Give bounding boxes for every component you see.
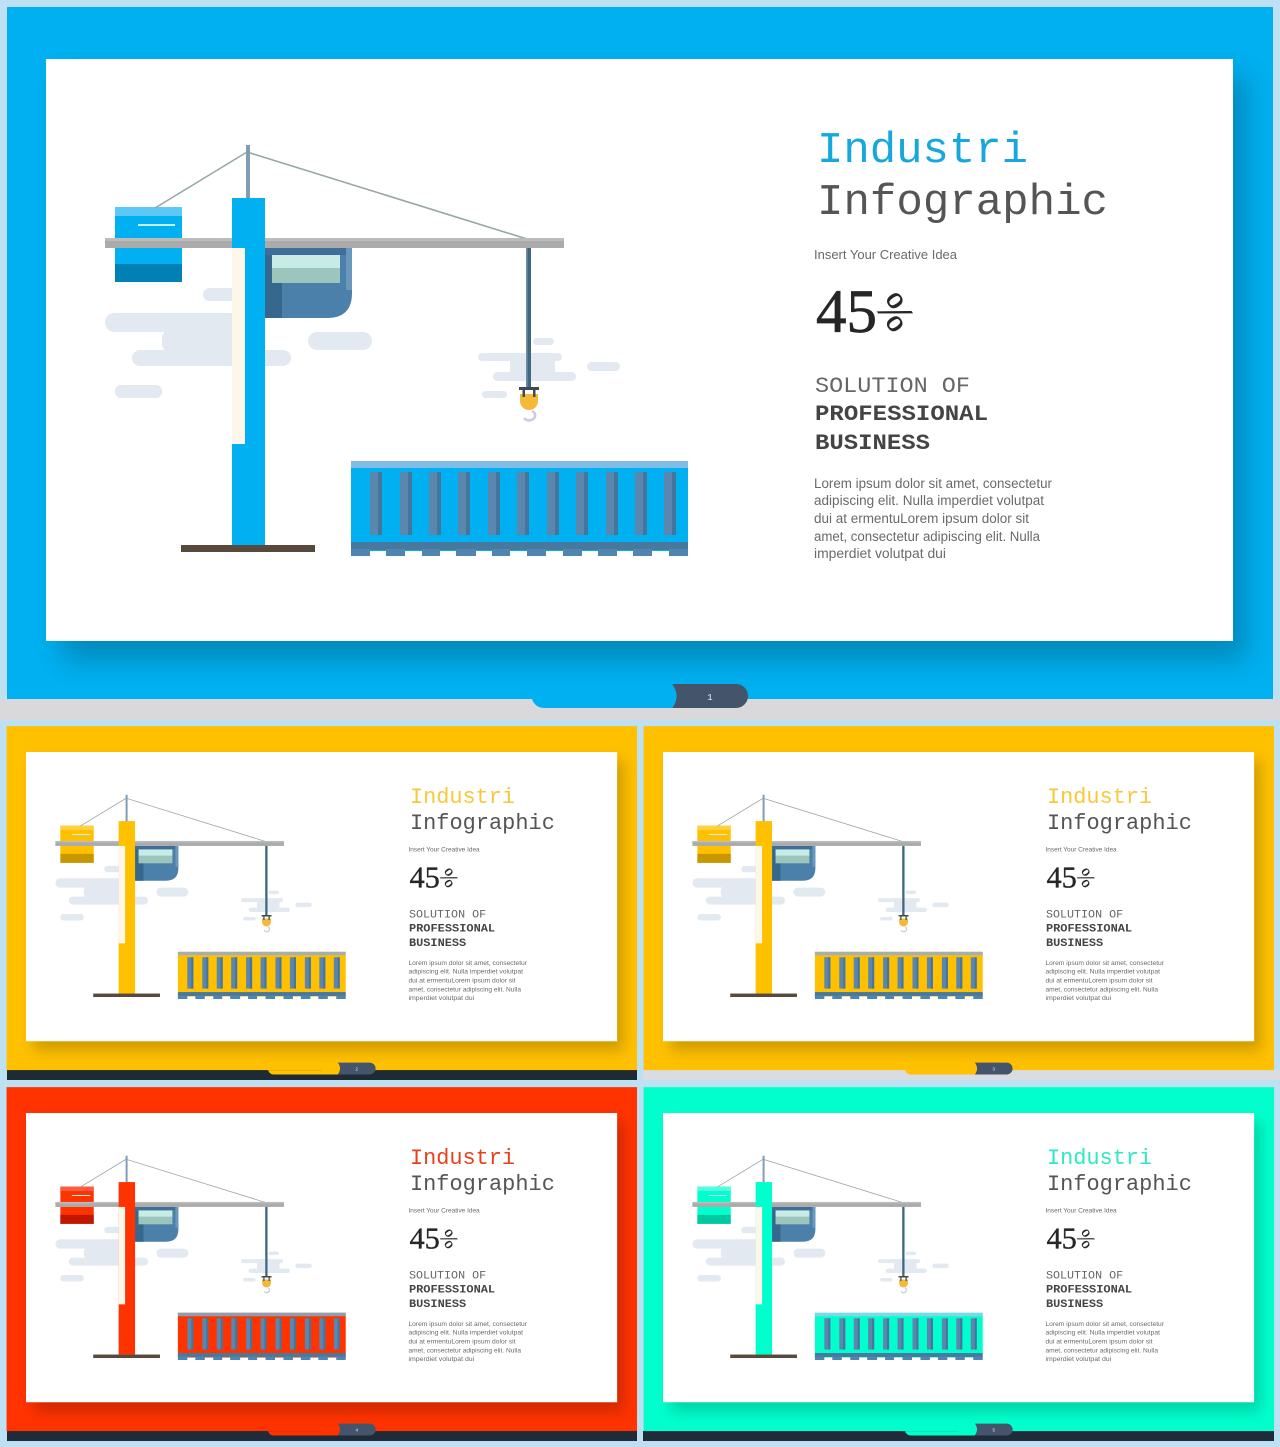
dark footer bar slide 2 xyxy=(7,1070,637,1080)
body text: amet, consectetur adipiscing elit. Nulla xyxy=(408,987,521,994)
body text: adipiscing elit. Nulla imperdiet volutpat xyxy=(1045,1330,1160,1337)
body text xyxy=(1045,960,1165,1002)
counterweight xyxy=(60,826,94,863)
operator cab xyxy=(135,846,178,881)
body text: dui at ermentuLorem ipsum dolor sit xyxy=(408,978,516,985)
heading line 2: PROFESSIONAL xyxy=(1046,1284,1132,1296)
percent sign: % xyxy=(1071,864,1101,892)
title line 1: Industri xyxy=(817,126,1028,176)
title line 1: Industri xyxy=(1047,1146,1152,1171)
slide background xyxy=(7,726,637,1070)
body text: amet, consectetur adipiscing elit. Nulla xyxy=(1045,987,1158,994)
heading line 1: SOLUTION OF xyxy=(409,910,486,921)
page tab xyxy=(905,1424,1013,1436)
page tab: 4 xyxy=(355,1428,358,1434)
shipping container xyxy=(351,461,688,556)
title line 2: Infographic xyxy=(817,178,1108,228)
dark footer bar slide 4 xyxy=(7,1431,637,1441)
body text xyxy=(814,476,1052,561)
clouds xyxy=(105,288,620,398)
page tab xyxy=(268,1424,376,1436)
panel: red slide 4 xyxy=(7,1087,637,1436)
heading line 1: SOLUTION OF xyxy=(1046,1271,1123,1283)
crane tower and jib xyxy=(55,795,284,997)
body text: Lorem ipsum dolor sit amet, consectetur xyxy=(408,1321,528,1328)
body text: imperdiet volutpat dui xyxy=(408,1356,475,1363)
slide background xyxy=(7,1087,637,1431)
shipping container xyxy=(815,1313,983,1360)
hook and rope xyxy=(519,248,539,420)
operator cab xyxy=(265,248,352,318)
white card xyxy=(46,59,1233,641)
big number: 45 xyxy=(1046,861,1077,895)
operator cab xyxy=(135,1207,178,1242)
slide background xyxy=(7,7,1273,699)
heading line 2: PROFESSIONAL xyxy=(1046,923,1132,935)
title line 2: Infographic xyxy=(410,811,555,836)
slide background xyxy=(644,1087,1274,1431)
white card xyxy=(26,1113,617,1402)
crane tower and jib xyxy=(692,1156,921,1358)
page tab: 2 xyxy=(355,1067,358,1073)
slide background xyxy=(644,726,1274,1070)
card shadow xyxy=(62,76,1246,660)
hook and rope xyxy=(899,1207,909,1293)
gray band under main slide xyxy=(0,699,1280,720)
big number: 45 xyxy=(1046,1222,1077,1256)
body text: dui at ermentuLorem ipsum dolor sit xyxy=(1045,978,1153,985)
heading line 1: SOLUTION OF xyxy=(409,1271,486,1283)
percent sign: % xyxy=(434,864,464,892)
clouds xyxy=(692,1227,949,1281)
body text: Lorem ipsum dolor sit amet, consectetur xyxy=(408,960,528,967)
page tab xyxy=(268,1063,376,1075)
body text xyxy=(1045,1321,1165,1363)
crane tower and jib xyxy=(55,1156,284,1358)
white card xyxy=(663,1113,1254,1402)
crane tower and jib xyxy=(692,795,921,997)
big number: 45 xyxy=(816,279,877,346)
heading line 3: BUSINESS xyxy=(815,431,930,456)
panel: main blue slide xyxy=(7,7,1273,708)
heading line 3: BUSINESS xyxy=(409,938,467,950)
body text: adipiscing elit. Nulla imperdiet volutpat xyxy=(814,493,1044,508)
big number: 45 xyxy=(409,861,440,895)
percent sign: % xyxy=(865,285,923,340)
body text: adipiscing elit. Nulla imperdiet volutpat xyxy=(408,1330,523,1337)
title line 2: Infographic xyxy=(1047,811,1192,836)
body text: imperdiet volutpat dui xyxy=(408,995,475,1002)
card shadow xyxy=(34,1121,624,1412)
counterweight xyxy=(60,1187,94,1224)
title line 1: Industri xyxy=(410,1146,515,1171)
operator cab xyxy=(772,846,815,881)
body text: adipiscing elit. Nulla imperdiet volutpat xyxy=(1045,969,1160,976)
white card xyxy=(26,752,617,1041)
percent sign: % xyxy=(434,1225,464,1253)
subtitle: Insert Your Creative Idea xyxy=(1045,1207,1117,1214)
card shadow xyxy=(671,1121,1261,1412)
text block xyxy=(408,1146,555,1363)
counterweight xyxy=(115,207,182,282)
body text: adipiscing elit. Nulla imperdiet volutpat xyxy=(408,969,523,976)
dark footer bar slide 5 xyxy=(643,1431,1274,1441)
percent sign: % xyxy=(1071,1225,1101,1253)
body text: dui at ermentuLorem ipsum dolor sit xyxy=(814,511,1029,526)
heading line 1: SOLUTION OF xyxy=(815,374,970,399)
page tab xyxy=(532,684,748,708)
heading line 3: BUSINESS xyxy=(1046,938,1104,950)
page tab: 5 xyxy=(992,1428,995,1434)
subtitle: Insert Your Creative Idea xyxy=(408,1207,480,1214)
white card xyxy=(663,752,1254,1041)
body text: Lorem ipsum dolor sit amet, consectetur xyxy=(1045,960,1165,967)
hook and rope xyxy=(262,846,272,932)
title line 2: Infographic xyxy=(410,1172,555,1197)
hook and rope xyxy=(899,846,909,932)
subtitle: Insert Your Creative Idea xyxy=(408,846,480,853)
title line 1: Industri xyxy=(410,785,515,810)
subtitle: Insert Your Creative Idea xyxy=(814,247,958,262)
heading line 2: PROFESSIONAL xyxy=(815,402,988,427)
counterweight xyxy=(697,1187,731,1224)
body text: Lorem ipsum dolor sit amet, consectetur xyxy=(1045,1321,1165,1328)
body text: imperdiet volutpat dui xyxy=(1045,1356,1112,1363)
heading line 2: PROFESSIONAL xyxy=(409,923,495,935)
panel: teal slide 5 xyxy=(644,1087,1274,1436)
shipping container xyxy=(815,952,983,999)
heading line 3: BUSINESS xyxy=(1046,1299,1104,1311)
body text xyxy=(408,960,528,1002)
heading line 1: SOLUTION OF xyxy=(1046,910,1123,921)
counterweight xyxy=(697,826,731,863)
text block xyxy=(814,126,1108,561)
body text: dui at ermentuLorem ipsum dolor sit xyxy=(408,1339,516,1346)
text block xyxy=(1045,1146,1192,1363)
body text: amet, consectetur adipiscing elit. Nulla xyxy=(1045,1348,1158,1355)
gray band under slide 3 xyxy=(643,1070,1280,1080)
text block xyxy=(408,785,555,1002)
operator cab xyxy=(772,1207,815,1242)
body text xyxy=(408,1321,528,1363)
page tab: 1 xyxy=(707,693,713,703)
title line 1: Industri xyxy=(1047,785,1152,810)
body text: Lorem ipsum dolor sit amet, consectetur xyxy=(814,476,1052,491)
title line 2: Infographic xyxy=(1047,1172,1192,1197)
body text: imperdiet volutpat dui xyxy=(1045,995,1112,1002)
text block xyxy=(1045,785,1192,1002)
heading line 3: BUSINESS xyxy=(409,1299,467,1311)
clouds xyxy=(55,1227,312,1281)
shipping container xyxy=(178,1313,346,1360)
body text: amet, consectetur adipiscing elit. Nulla xyxy=(408,1348,521,1355)
crane tower and jib xyxy=(105,145,564,552)
heading line 2: PROFESSIONAL xyxy=(409,1284,495,1296)
page tab xyxy=(905,1063,1013,1075)
clouds xyxy=(55,866,312,920)
subtitle: Insert Your Creative Idea xyxy=(1045,846,1117,853)
panel: yellow slide 2 xyxy=(7,726,637,1075)
card shadow xyxy=(34,760,624,1051)
clouds xyxy=(692,866,949,920)
big number: 45 xyxy=(409,1222,440,1256)
page tab: 3 xyxy=(992,1067,995,1073)
panel: yellow slide 3 xyxy=(644,726,1274,1075)
card shadow xyxy=(671,760,1261,1051)
shipping container xyxy=(178,952,346,999)
body text: imperdiet volutpat dui xyxy=(814,546,946,561)
body text: dui at ermentuLorem ipsum dolor sit xyxy=(1045,1339,1153,1346)
body text: amet, consectetur adipiscing elit. Nulla xyxy=(814,529,1040,544)
hook and rope xyxy=(262,1207,272,1293)
